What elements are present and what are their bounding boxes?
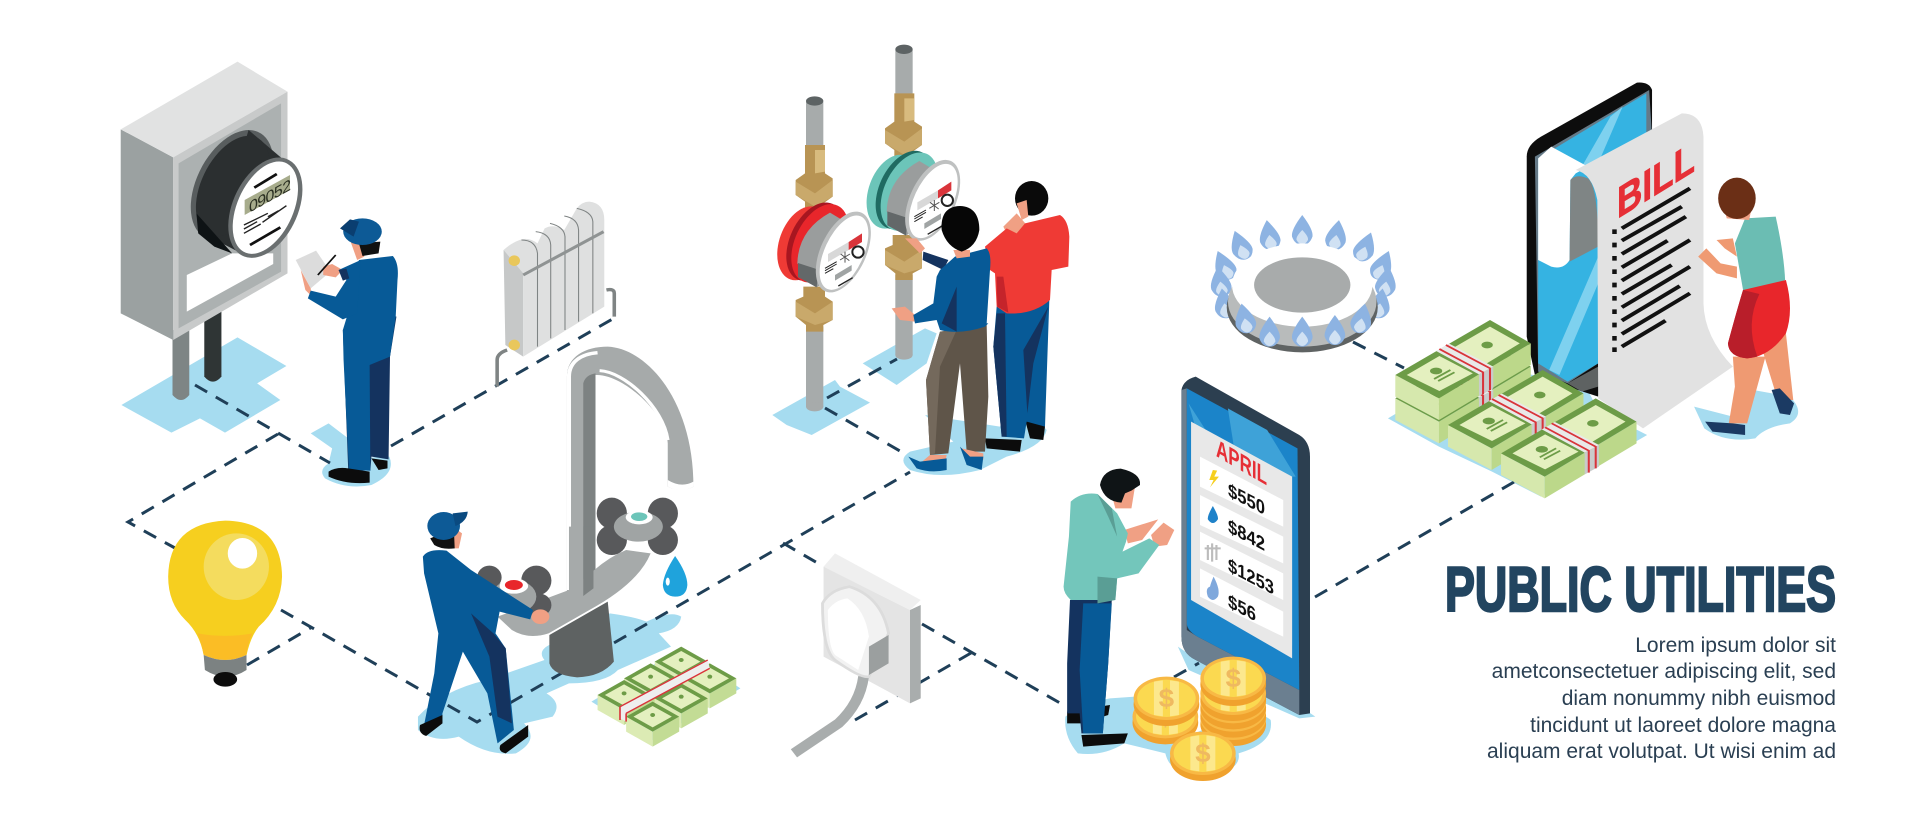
dashed connector lines bbox=[128, 317, 1514, 722]
cold water tap bbox=[597, 498, 678, 555]
description text: Lorem ipsum dolor sit bbox=[1635, 634, 1836, 657]
month and cost amounts: $56 bbox=[1228, 591, 1256, 626]
water meters bbox=[768, 45, 972, 411]
month and cost amounts: $842 bbox=[1228, 516, 1265, 556]
cold water meter bbox=[857, 45, 972, 360]
man checking phone bbox=[1064, 469, 1174, 747]
description text: ametconsectetuer adipiscing elit, sed bbox=[1492, 660, 1836, 683]
description text bbox=[1487, 634, 1836, 763]
radiator bbox=[497, 202, 614, 387]
woman reading bill bbox=[1698, 178, 1794, 435]
bill heading: BILL bbox=[1617, 132, 1695, 229]
month and cost amounts bbox=[1216, 434, 1274, 626]
water drop bbox=[663, 556, 687, 597]
light bulb bbox=[168, 521, 282, 687]
meter dial bbox=[174, 118, 317, 268]
month and cost amounts: $1253 bbox=[1228, 555, 1274, 600]
phone with monthly costs bbox=[1181, 377, 1310, 715]
gold coins bbox=[1132, 657, 1266, 781]
worker with clipboard bbox=[296, 218, 398, 483]
description text: tincidunt ut laoreet dolore magna bbox=[1530, 714, 1836, 737]
phone with bill bbox=[1527, 83, 1733, 428]
socket and plug bbox=[794, 553, 921, 753]
faucet bbox=[477, 347, 693, 677]
woman in blue top bbox=[892, 206, 990, 471]
month and cost amounts: $550 bbox=[1228, 480, 1265, 520]
man in red sweater bbox=[985, 181, 1069, 452]
description text: aliquam erat volutpat. Ut wisi enim ad bbox=[1487, 740, 1836, 763]
hot water tap bbox=[477, 566, 551, 617]
large money bundles bbox=[1395, 320, 1637, 498]
description text: diam nonummy nibh euismod bbox=[1562, 687, 1836, 710]
month and cost amounts: APRIL bbox=[1216, 434, 1267, 491]
cost icons bbox=[1205, 470, 1221, 600]
couple reading meters bbox=[892, 181, 1069, 471]
worker at tap bbox=[420, 512, 549, 753]
small money bundles bbox=[591, 647, 740, 747]
floor shadows bbox=[121, 328, 1798, 778]
hot water meter bbox=[768, 96, 882, 411]
meter reading: 09052 bbox=[249, 175, 291, 217]
gas burner bbox=[1208, 215, 1399, 352]
electricity meter box bbox=[121, 62, 317, 400]
